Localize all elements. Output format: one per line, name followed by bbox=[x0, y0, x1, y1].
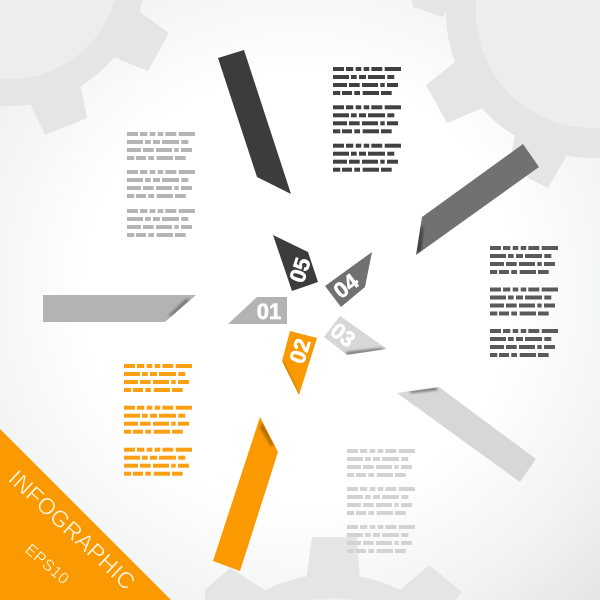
flag 04: 04 bbox=[329, 268, 364, 303]
text block: dark top bbox=[333, 67, 401, 172]
text block: grey left bbox=[127, 132, 195, 237]
subtitle: EPS10 bbox=[21, 541, 72, 588]
bar: 05 dark bbox=[218, 50, 291, 194]
corner banner bbox=[0, 429, 171, 600]
bar: 01 mid grey bbox=[43, 295, 196, 322]
text block: light grey bottom bbox=[347, 449, 415, 553]
text block: dark grey right bbox=[490, 246, 558, 357]
flag 03 bbox=[324, 316, 387, 355]
flag 01 bbox=[228, 297, 287, 324]
flag 02: 02 bbox=[284, 335, 316, 367]
text block: orange left bbox=[124, 364, 192, 476]
bar: 03 light grey bbox=[397, 387, 536, 482]
flag 01: 01 bbox=[257, 299, 281, 324]
icon: gear bottom bbox=[205, 537, 462, 600]
flag 05: 05 bbox=[284, 254, 316, 286]
bar: 02 orange bbox=[213, 417, 278, 571]
title: INFOGRAPHIC bbox=[4, 465, 141, 595]
flag 04 bbox=[325, 252, 372, 307]
flag 03: 03 bbox=[326, 318, 360, 352]
icon: gear top right bbox=[412, 0, 600, 188]
flag 02 bbox=[281, 331, 317, 395]
icon: gear top left bbox=[0, 0, 169, 135]
bar: 04 grey bbox=[416, 144, 539, 255]
flag 05 bbox=[273, 235, 318, 291]
